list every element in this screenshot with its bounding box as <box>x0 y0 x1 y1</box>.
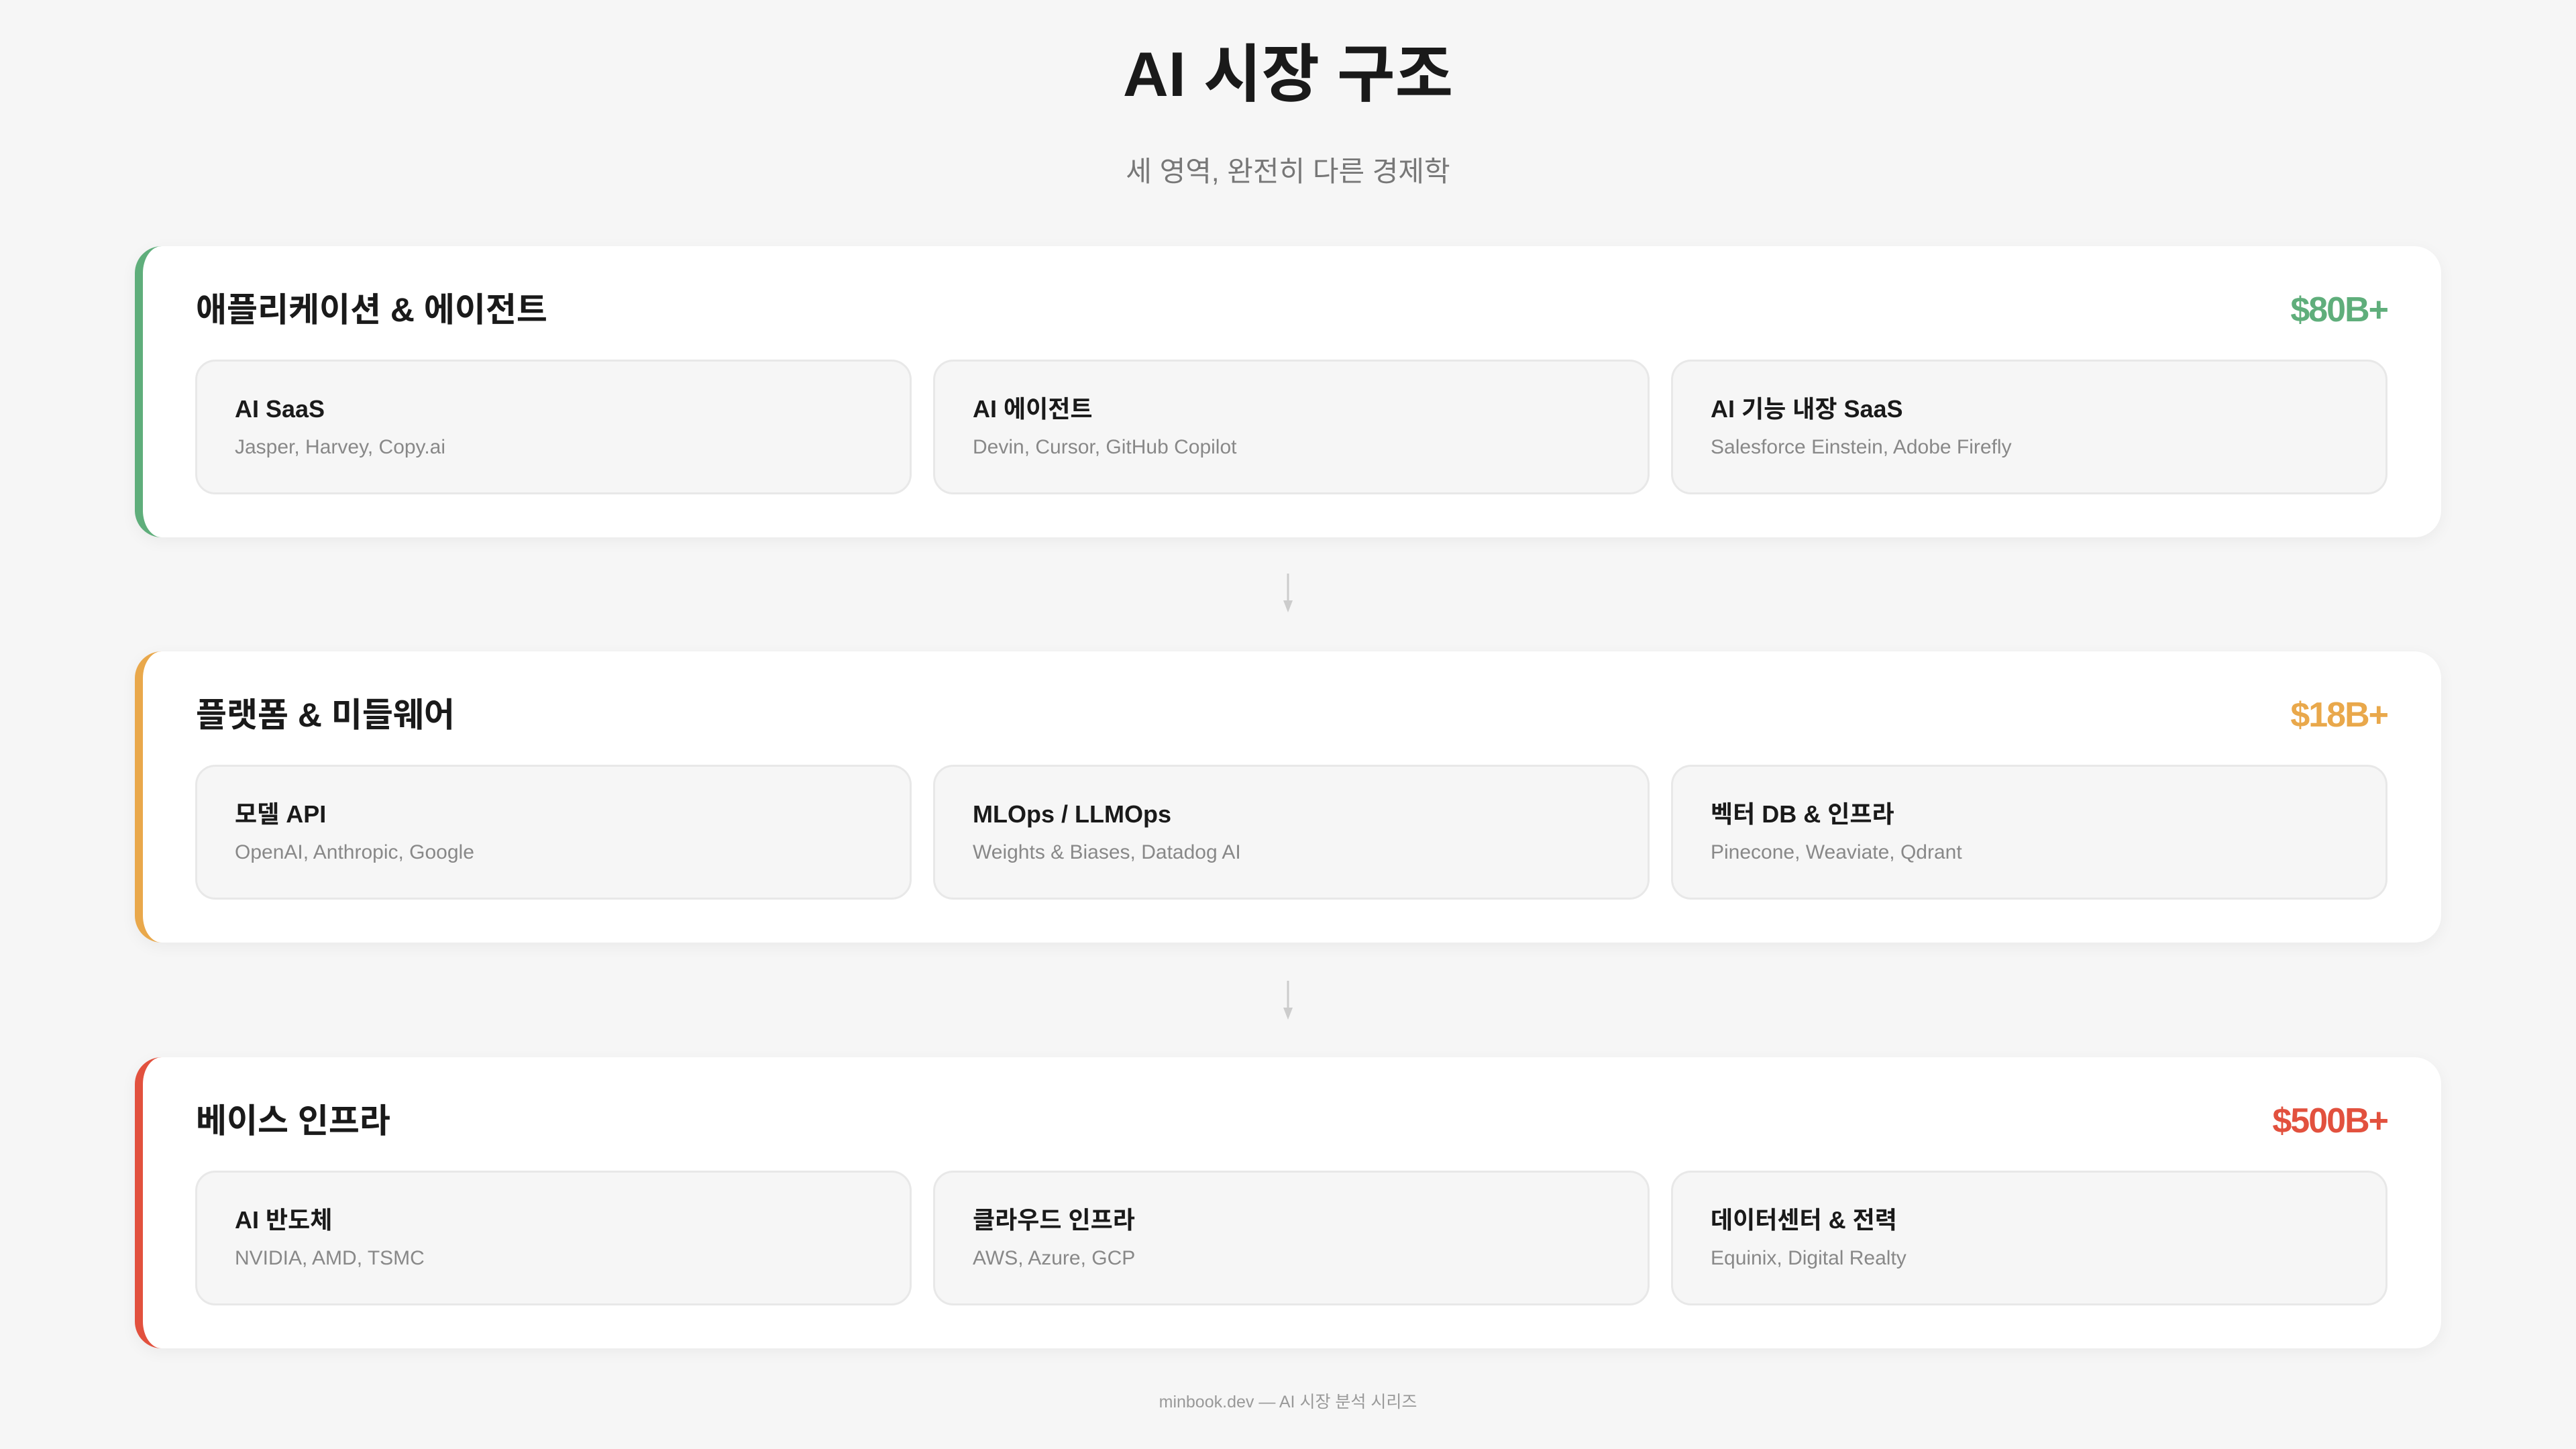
card: vector DB: 벡터 DB & 인프라 <box>1711 800 1894 828</box>
panel heading: 베이스 인프라 <box>196 1102 390 1140</box>
card: data center & power: 데이터센터 & 전력 <box>1711 1206 1897 1234</box>
card: AI SaaS: AI SaaS <box>235 395 325 423</box>
card: cloud infra <box>933 1171 1650 1305</box>
card: cloud infra: AWS, Azure, GCP <box>973 1247 1135 1269</box>
card: AI SaaS: Jasper, Harvey, Copy.ai <box>235 436 445 458</box>
card: AI chips: AI 반도체 <box>235 1206 332 1234</box>
card: model API: 모델 API <box>235 800 326 828</box>
arrow <box>1283 574 1293 612</box>
card: AI agents: AI 에이전트 <box>973 395 1092 423</box>
card: AI chips: NVIDIA, AMD, TSMC <box>235 1247 425 1269</box>
card: model API <box>195 765 912 900</box>
card: AI-embedded SaaS: Salesforce Einstein, Adobe Firefly <box>1711 436 2012 458</box>
card: data center & power: Equinix, Digital Realty <box>1711 1247 1907 1269</box>
card: AI-embedded SaaS <box>1671 360 2387 494</box>
card: vector DB: Pinecone, Weaviate, Qdrant <box>1711 841 1962 863</box>
panel heading: 플랫폼 & 미들웨어 <box>196 696 455 734</box>
card: MLOps <box>933 765 1650 900</box>
card: vector DB <box>1671 765 2387 900</box>
panel heading: 애플리케이션 & 에이전트 <box>196 291 547 329</box>
card: AI SaaS <box>195 360 912 494</box>
card: AI chips <box>195 1171 912 1305</box>
title: AI 시장 구조 <box>1123 39 1453 109</box>
panel: base infrastructure <box>135 1057 2441 1348</box>
panel: applications & agents <box>135 246 2441 537</box>
card: AI-embedded SaaS: AI 기능 내장 SaaS <box>1711 395 1903 423</box>
card: MLOps: MLOps / LLMOps <box>973 800 1171 828</box>
card: AI agents: Devin, Cursor, GitHub Copilot <box>973 436 1237 458</box>
footer: minbook.dev — AI 시장 분석 시리즈 <box>1159 1393 1417 1411</box>
card: data center & power <box>1671 1171 2387 1305</box>
card: AI agents <box>933 360 1650 494</box>
arrow <box>1283 981 1293 1020</box>
card: MLOps: Weights & Biases, Datadog AI <box>973 841 1241 863</box>
market value: $80B+ <box>2290 290 2387 329</box>
market value: $18B+ <box>2290 696 2387 735</box>
market value: $500B+ <box>2272 1102 2387 1140</box>
card: cloud infra: 클라우드 인프라 <box>973 1206 1135 1234</box>
subtitle: 세 영역, 완전히 다른 경제학 <box>1126 156 1450 187</box>
card: model API: OpenAI, Anthropic, Google <box>235 841 474 863</box>
panel: platform & middleware <box>135 651 2441 943</box>
